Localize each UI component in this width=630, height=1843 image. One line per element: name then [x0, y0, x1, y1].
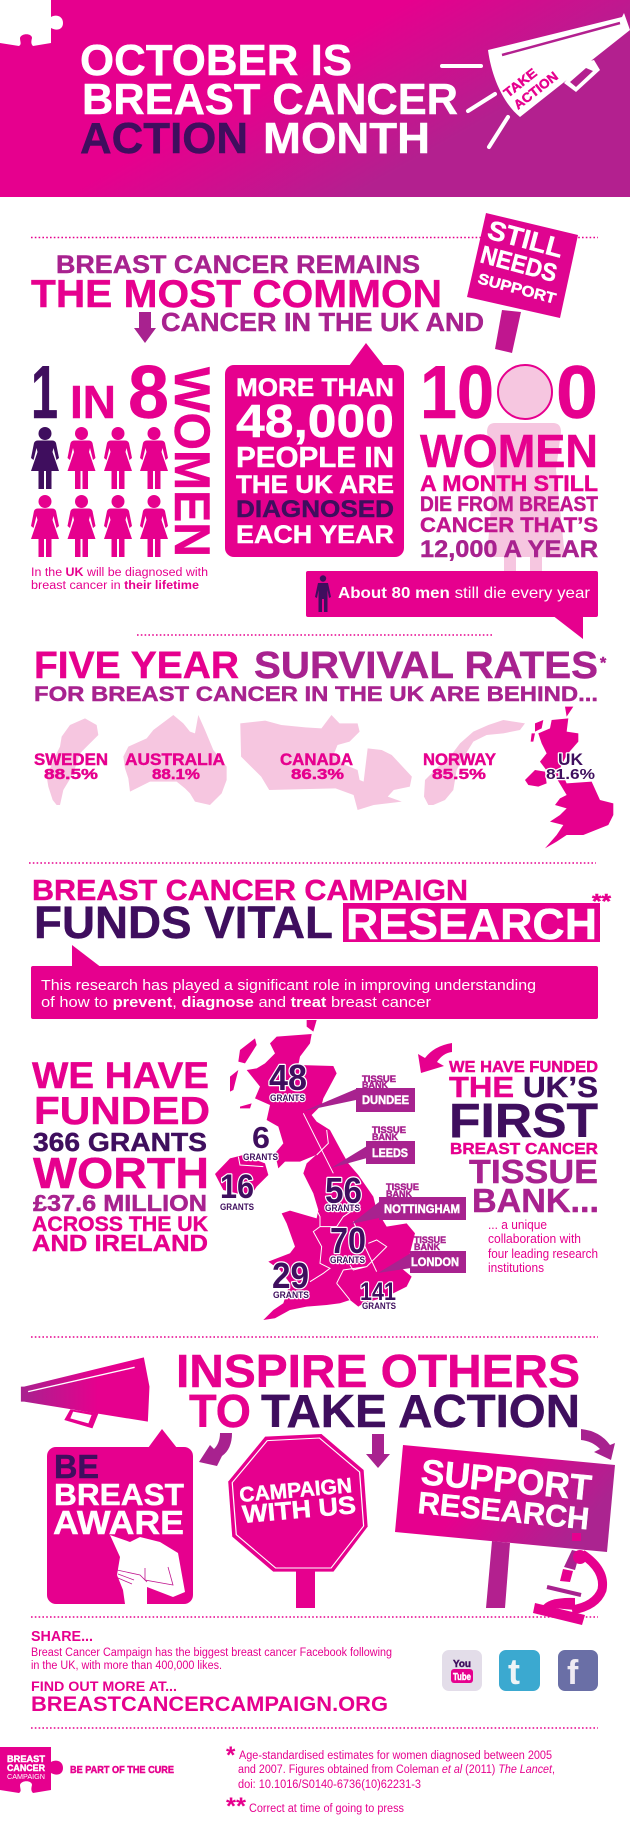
sign: support research [395, 1445, 615, 1625]
chart: survival rate maps [34, 707, 613, 848]
tissue bank labels: BANK [372, 1132, 398, 1142]
header banner [0, 0, 630, 197]
sign: campaign with us: WITH US [241, 1491, 357, 1529]
caption [31, 567, 208, 592]
stat: 1000 women: WOMEN [420, 425, 598, 477]
title: OCTOBER IS [80, 36, 352, 85]
footnotes: doi: 10.1016/S0140-6736(10)62231-3 [238, 1779, 421, 1791]
sign: campaign with us [228, 1434, 368, 1608]
text block: we have funded: ACROSS THE UK [32, 1213, 208, 1236]
sign: still needs support: NEEDS [477, 241, 560, 288]
text block: unique collaboration: institutions [488, 1261, 544, 1275]
tissue bank labels: TISSUE [386, 1182, 419, 1192]
sign: still needs support: STILL [484, 215, 567, 264]
stat: 1000 women: A MONTH STILL [420, 471, 598, 496]
labels: AUSTRALIA [125, 750, 225, 769]
stat: 1 in 8 women: IN [70, 376, 116, 428]
caption: breast cancer in their lifetime [31, 580, 199, 592]
tissue bank labels: BANK [362, 1080, 388, 1090]
text block: share [31, 1628, 392, 1716]
grant counts: GRANTS [330, 1255, 365, 1266]
grant counts: GRANTS [362, 1301, 396, 1312]
panel: 48,000 people: PEOPLE IN [236, 442, 394, 474]
panel: 48,000 people: 48,000 [236, 395, 394, 447]
text block: unique collaboration [488, 1218, 598, 1275]
stat: 1 in 8 women: WOMEN [164, 367, 220, 557]
text block: we have funded: WE HAVE [32, 1055, 209, 1096]
grant counts: 70 [330, 1220, 366, 1261]
grant counts: 56 [325, 1170, 362, 1211]
text block: first tissue bank [449, 1059, 599, 1219]
icon: Twitter [499, 1650, 540, 1692]
text block: we have funded: AND IRELAND [32, 1230, 208, 1256]
heading: inspire others: INSPIRE OTHERS [176, 1345, 580, 1397]
panel: be breast aware: BREAST [54, 1477, 184, 1512]
text block: unique collaboration: four leading research [488, 1247, 598, 1261]
stat: 1000 women [420, 350, 598, 572]
heading: funds vital research: RESEARCH [346, 900, 597, 949]
labels: 85.5% [432, 766, 486, 783]
heading: five year survival rates: SURVIVAL RATES [254, 645, 598, 687]
footnotes: Correct at time of going to press [249, 1803, 404, 1815]
callout: research role: of how to prevent , diagnose and treat breast cancer [41, 994, 431, 1011]
callout: 80 men [306, 571, 598, 639]
icon: YouTube: You [453, 1659, 471, 1670]
logo: Breast Cancer Campaign puzzle: CANCER [7, 1763, 45, 1774]
grant counts: GRANTS [243, 1152, 278, 1163]
footnotes: and 2007. Figures obtained from Coleman et al (2011) The Lancet, [238, 1764, 555, 1776]
text block: we have funded: £37.6 MILLION [33, 1190, 207, 1216]
labels [34, 750, 497, 783]
callout: 80 men: About 80 men still die every year [338, 585, 591, 602]
tissue bank labels: LEEDS [372, 1148, 408, 1160]
icon: Twitter: t [508, 1651, 520, 1692]
stat: 1000 women: 10 [420, 350, 494, 434]
grant counts: 48 [269, 1057, 307, 1098]
map: UK [525, 707, 613, 848]
grant counts: GRANTS [270, 1093, 305, 1104]
text block: first tissue bank: BREAST CANCER [450, 1141, 598, 1158]
text block: unique collaboration: collaboration with [488, 1232, 581, 1246]
arrow: down [134, 312, 156, 343]
icon: Facebook: f [567, 1654, 579, 1692]
text block: we have funded [32, 1055, 210, 1256]
heading: five year survival rates: * [600, 655, 607, 672]
grant counts: 141 [360, 1278, 396, 1306]
stat: 1000 women: DIE FROM BREAST [420, 493, 598, 516]
icon: megaphone: ACTION [511, 69, 561, 112]
labels: 88.5% [44, 766, 98, 783]
grant counts: GRANTS [273, 1290, 309, 1301]
footnotes: * [226, 1742, 236, 1769]
text block: share: SHARE... [31, 1628, 93, 1645]
stat: 1 in 8 women: 8 [128, 350, 169, 434]
grant counts [220, 1057, 396, 1312]
grant counts: GRANTS [220, 1202, 254, 1213]
tissue bank labels: LONDON [411, 1257, 459, 1269]
heading: five year survival rates: FOR BREAST CANCER IN THE UK ARE BEHIND... [34, 683, 598, 706]
map: UK grants [215, 1020, 466, 1320]
logo: Breast Cancer Campaign puzzle [0, 1747, 63, 1793]
stat: 1 in 8 women [31, 350, 220, 592]
tissue bank labels: BANK [386, 1189, 412, 1199]
callout: research role: This research has played a significant role in improving understanding [41, 977, 536, 994]
text block: unique collaboration: ... a unique [488, 1218, 547, 1232]
logo: Breast Cancer Campaign puzzle: BREAST [7, 1754, 45, 1765]
stat: 1000 women: CANCER THAT’S [420, 514, 598, 537]
chart: survival rate maps: UK [558, 750, 584, 769]
heading: funds vital research: BREAST CANCER CAMPAIGN [32, 875, 468, 907]
caption: In the UK will be diagnosed with [31, 567, 208, 579]
panel: 48,000 people: EACH YEAR [236, 521, 394, 549]
icon: microscope [533, 1533, 603, 1625]
footnotes [226, 1742, 555, 1820]
heading: funds vital research: ** [592, 891, 611, 913]
tagline: BE PART OF THE CURE [70, 1765, 174, 1776]
icon: man [315, 575, 331, 612]
tissue bank labels [304, 1074, 466, 1273]
title: BREAST CANCER [82, 75, 458, 124]
arrow: curved to map [418, 1043, 452, 1073]
icon: woman self-check [110, 1535, 185, 1604]
map shape [215, 1020, 415, 1320]
map: Sweden [47, 718, 98, 805]
footnotes: ** [226, 1793, 247, 1820]
labels: 88.1% [152, 766, 200, 783]
grant counts: 29 [272, 1255, 309, 1296]
title: ACTION [80, 114, 248, 163]
footnotes: Age-standardised estimates for women diagnosed between 2005 [239, 1750, 552, 1762]
text block: first tissue bank: WE HAVE FUNDED [449, 1059, 598, 1076]
callout: research role [31, 945, 598, 1019]
text block: we have funded: WORTH [33, 1149, 209, 1198]
icon: megaphone: TAKE [501, 65, 540, 100]
logo: Breast Cancer Campaign puzzle: CAMPAIGN [7, 1772, 45, 1781]
puzzle piece [0, 0, 63, 46]
text block: share: FIND OUT MORE AT... [31, 1678, 177, 1694]
arrows: three action arrows [199, 1429, 615, 1468]
grant counts: GRANTS [325, 1203, 360, 1214]
panel: be breast aware: BE [54, 1448, 99, 1485]
tissue bank labels: TISSUE [414, 1235, 446, 1245]
heading: five year survival rates [34, 645, 607, 706]
labels: CANADA [280, 750, 353, 769]
map: Canada [240, 715, 412, 810]
text block: share: BREASTCANCERCAMPAIGN.ORG [31, 1693, 388, 1716]
stat: 1000 women: 12,000 A YEAR [420, 536, 598, 563]
tissue bank labels: TISSUE [362, 1074, 396, 1084]
icon: YouTube: Tube [453, 1672, 471, 1683]
text block: share: in the UK, with more than 400,000 likes. [31, 1660, 222, 1672]
labels: NORWAY [423, 750, 497, 769]
text block: first tissue bank: BANK... [472, 1182, 599, 1219]
text block: we have funded: FUNDED [34, 1090, 210, 1133]
panel: 48,000 people: DIAGNOSED [236, 496, 394, 523]
heading: most common cancer: BREAST CANCER REMAINS [56, 251, 420, 279]
grant counts: 16 [220, 1168, 254, 1206]
text block: share: Breast Cancer Campaign has the biggest breast cancer Facebook following [31, 1647, 392, 1659]
heading: funds vital research [32, 875, 611, 949]
map: Norway [424, 720, 525, 805]
tissue bank labels: DUNDEE [362, 1095, 409, 1107]
icon: megaphone [442, 13, 630, 147]
labels: SWEDEN [34, 750, 108, 769]
stat: 1000 women: 0 [556, 350, 598, 434]
heading: most common cancer [31, 251, 484, 337]
heading: most common cancer: CANCER IN THE UK AND [161, 307, 484, 337]
panel: 48,000 people: THE UK ARE [236, 471, 394, 499]
text block: first tissue bank: FIRST [449, 1095, 598, 1148]
map: Australia [123, 715, 227, 805]
heading: five year survival rates: FIVE YEAR [34, 645, 239, 687]
sign: campaign with us: CAMPAIGN [238, 1474, 353, 1507]
sign: support research: RESEARCH [416, 1485, 591, 1536]
stat: 1 in 8 women: 1 [31, 350, 58, 434]
icon: Facebook [558, 1650, 598, 1692]
panel: be breast aware [47, 1429, 193, 1604]
panel: 48,000 people: MORE THAN [236, 374, 394, 402]
tissue bank labels: BANK [414, 1242, 440, 1252]
sign: still needs support [467, 213, 578, 353]
panel: be breast aware: AWARE [53, 1504, 184, 1541]
icon: pink megaphone [21, 1357, 149, 1428]
heading: most common cancer: THE MOST COMMON [31, 273, 442, 316]
heading: inspire others: TO [189, 1385, 251, 1437]
heading: inspire others [176, 1345, 580, 1437]
grant counts: 6 [252, 1120, 270, 1155]
chart: survival rate maps: 81.6% [546, 766, 595, 783]
heading: funds vital research: FUNDS VITAL [34, 897, 333, 948]
sign: still needs support: SUPPORT [476, 270, 558, 308]
sign: support research: SUPPORT [419, 1451, 593, 1508]
tissue bank labels: NOTTINGHAM [384, 1204, 460, 1216]
heading: inspire others: TAKE ACTION [261, 1385, 580, 1437]
icons: social media [442, 1650, 598, 1692]
text block: first tissue bank: TISSUE [469, 1153, 598, 1190]
title [80, 36, 458, 163]
icons: eight women [31, 427, 168, 557]
icon: pale woman figure [487, 423, 565, 572]
text block: first tissue bank: THE [449, 1072, 514, 1104]
panel: 48,000 people [225, 343, 404, 557]
tissue bank labels: TISSUE [372, 1125, 406, 1135]
icon: YouTube [442, 1650, 482, 1691]
text block: we have funded: 366 GRANTS [33, 1127, 207, 1157]
title: MONTH [263, 114, 430, 163]
text block: first tissue bank: UK’S [523, 1072, 598, 1104]
labels: 86.3% [291, 766, 344, 783]
